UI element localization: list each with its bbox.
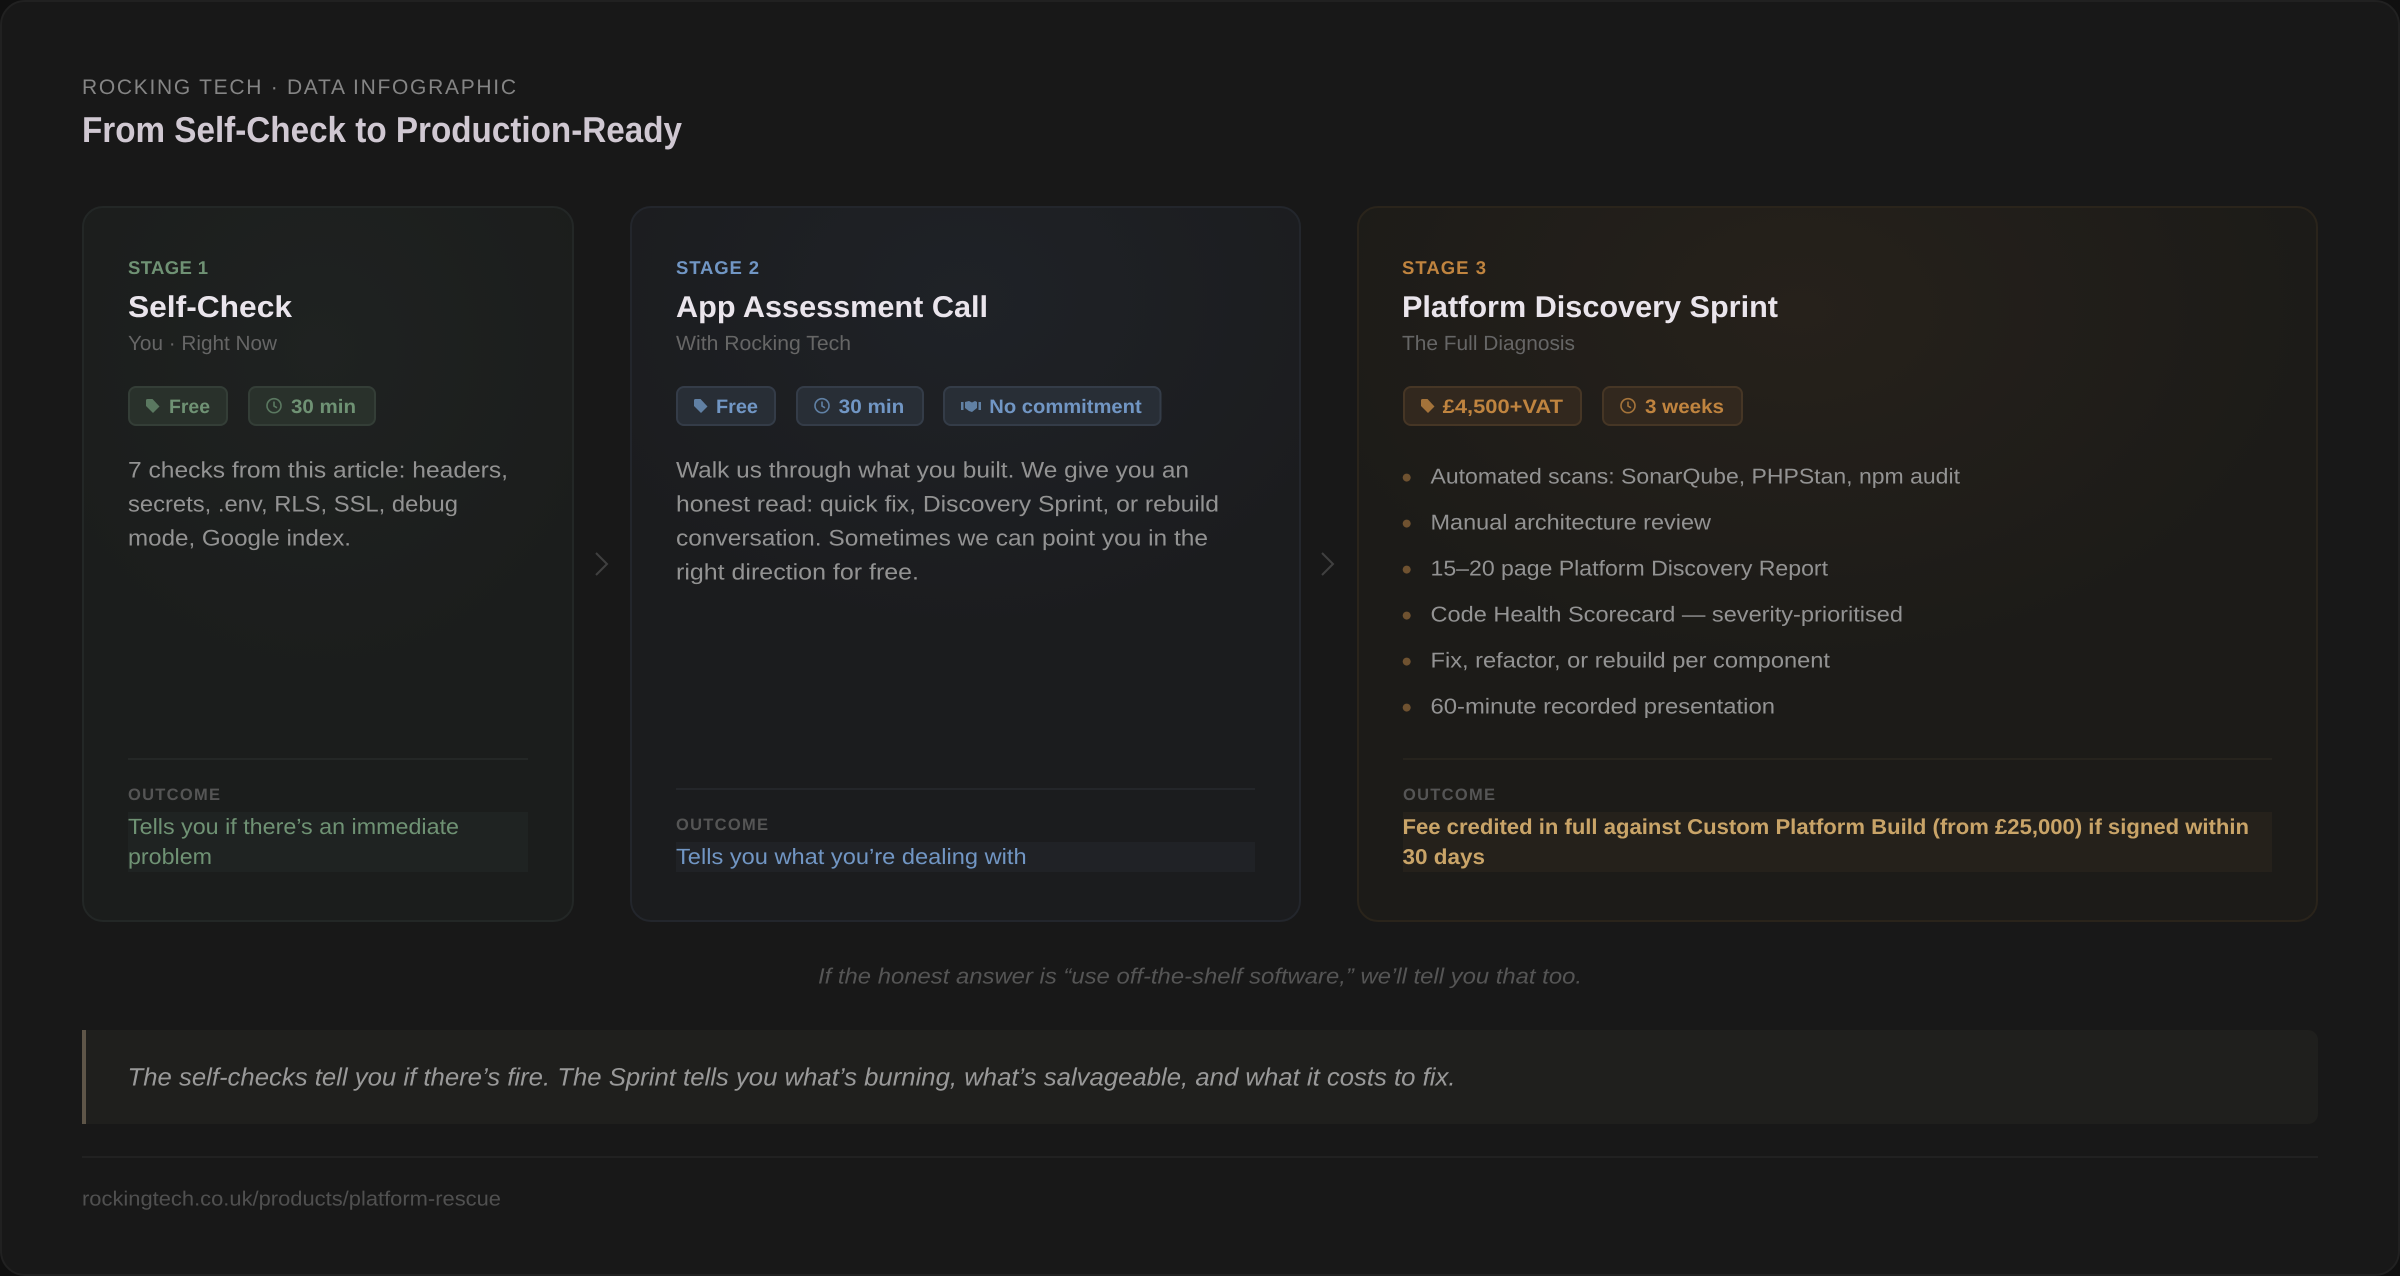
card background (631, 207, 1300, 921)
badge: 30 min: 30 min (839, 396, 904, 418)
deliverables list: Manual architecture review (1430, 511, 1712, 535)
badge: 30 min (249, 387, 375, 425)
icon: clock (815, 399, 829, 413)
description (128, 457, 508, 550)
callout quote: The self-checks tell you if there’s fire. The Sprint tells you what’s burning, what’s salvageable, and what it costs to fix. (128, 1064, 1456, 1092)
outcome (676, 842, 1255, 872)
deliverables list: 15–20 page Platform Discovery Report (1430, 557, 1828, 581)
badge: duration: 3 weeks (1645, 396, 1724, 418)
stage title: Self-Check (128, 291, 292, 324)
card background (1358, 207, 2317, 921)
subtitle: The Full Diagnosis (1402, 332, 1575, 355)
outcome: Tells you what you’re dealing with (676, 844, 1027, 869)
badge: 30 min (797, 387, 923, 425)
header (82, 76, 682, 150)
badge: no commitment: No commitment (989, 396, 1142, 418)
icon: tag (694, 399, 708, 413)
badge: price: £4,500+VAT (1443, 396, 1563, 418)
outcome (128, 812, 528, 872)
description: secrets, .env, RLS, SSL, debug (128, 491, 458, 516)
description: Walk us through what you built. We give you an (676, 457, 1189, 482)
eyebrow: ROCKING TECH · DATA INFOGRAPHIC (82, 76, 516, 99)
outcome label: OUTCOME (128, 786, 220, 804)
outcome label: OUTCOME (1403, 786, 1495, 804)
icon: tag (1421, 399, 1434, 413)
stage label: STAGE 1 (128, 257, 208, 278)
panel: stage 3 discovery sprint (1358, 207, 2317, 921)
deliverables list: Code Health Scorecard — severity-prioritised (1430, 603, 1903, 627)
stage label: STAGE 2 (676, 257, 759, 278)
outcome label: OUTCOME (676, 816, 768, 834)
badge: free (677, 387, 775, 425)
badge: free: Free (716, 396, 758, 418)
icon: clock (1621, 399, 1635, 413)
outcome (1402, 812, 2272, 872)
badge: 30 min: 30 min (291, 396, 356, 418)
panel: stage 1 self-check (83, 207, 573, 921)
icon: handshake (961, 401, 981, 412)
outcome: problem (128, 844, 212, 869)
badge: free: Free (169, 396, 210, 418)
icon: clock (267, 399, 281, 413)
card background (83, 207, 573, 921)
badge: price (1404, 387, 1581, 425)
arrow: stage 2 to stage 3 (1322, 553, 1333, 575)
outcome: Tells you if there’s an immediate (128, 814, 459, 839)
stage title: App Assessment Call (676, 291, 988, 324)
description (676, 457, 1219, 584)
description: conversation. Sometimes we can point you in the (676, 525, 1208, 550)
icon: tag (146, 399, 160, 413)
panel: stage 2 assessment call (631, 207, 1300, 921)
deliverables list: 60-minute recorded presentation (1430, 695, 1775, 719)
deliverables list: Fix, refactor, or rebuild per component (1430, 649, 1830, 673)
description: honest read: quick fix, Discovery Sprint, or rebuild (676, 491, 1219, 516)
stage title: Platform Discovery Sprint (1402, 291, 1778, 324)
description: right direction for free. (676, 559, 919, 584)
badge: no commitment (944, 387, 1160, 425)
arrow: stage 1 to stage 2 (596, 553, 607, 575)
subtitle: With Rocking Tech (676, 332, 851, 355)
callout quote (82, 1030, 2318, 1124)
badge: free (129, 387, 227, 425)
note: If the honest answer is “use off-the-shelf software,” we’ll tell you that too. (818, 963, 1582, 988)
subtitle: You · Right Now (128, 332, 277, 355)
deliverables list (1403, 465, 1960, 719)
outcome: 30 days (1402, 845, 1485, 869)
stage label: STAGE 3 (1402, 257, 1486, 278)
badge: duration (1603, 387, 1742, 425)
description: 7 checks from this article: headers, (128, 457, 508, 482)
description: mode, Google index. (128, 525, 351, 550)
deliverables list: Automated scans: SonarQube, PHPStan, npm audit (1430, 465, 1960, 489)
outcome: Fee credited in full against Custom Platform Build (from £25,000) if signed within (1402, 815, 2249, 839)
footer url: rockingtech.co.uk/products/platform-rescue (82, 1188, 501, 1211)
title: From Self-Check to Production-Ready (82, 109, 682, 150)
